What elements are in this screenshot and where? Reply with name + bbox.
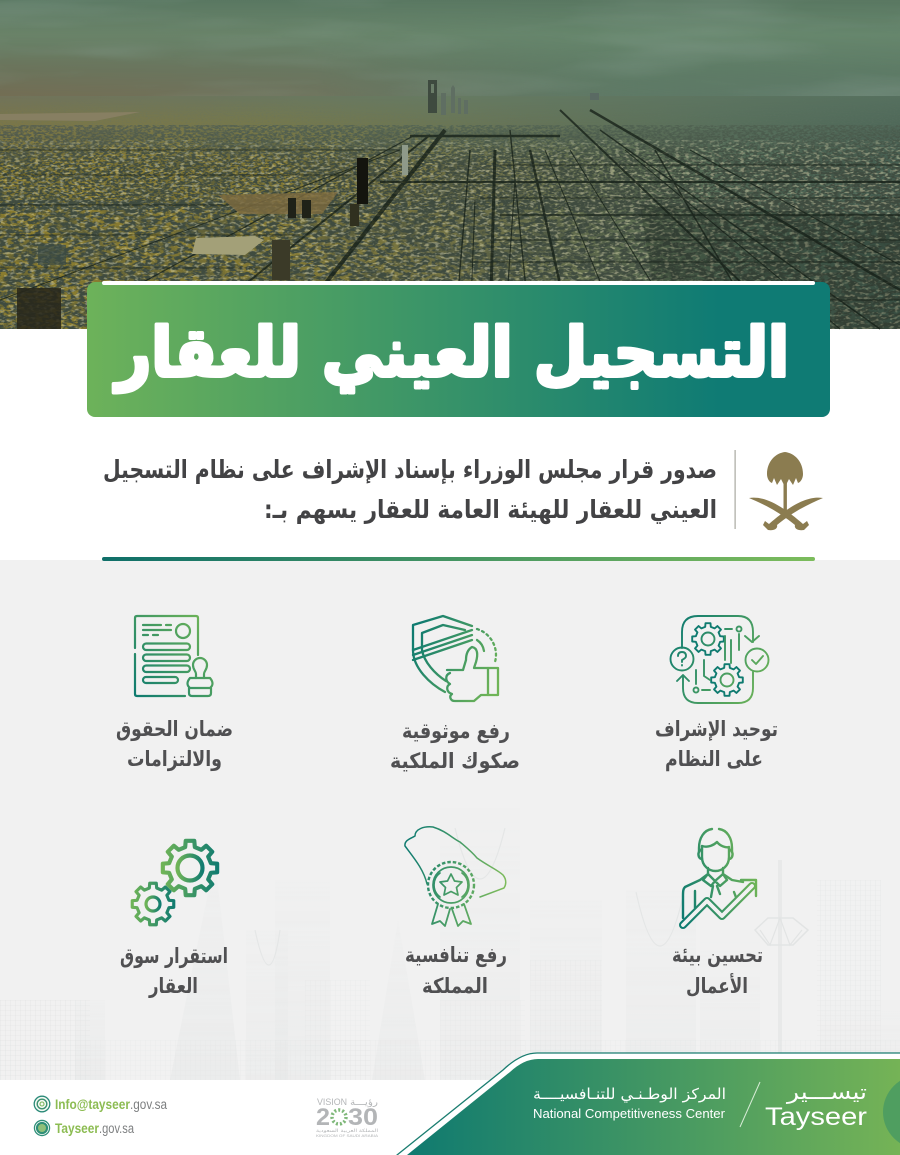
label: على النظام [665,747,763,771]
icon: document with stamp [135,616,212,696]
label: العقار [148,974,198,998]
label: رفع موثوقية [402,719,510,743]
benefit: improving the business environment [672,829,763,998]
grey content area [0,560,900,1080]
title banner [87,281,830,417]
Tayseer logo Arabic: تيســـير [786,1080,867,1104]
contact: website: Tayseer [55,1121,100,1136]
contact: email: Info@tayseer [55,1097,131,1112]
logo: Vision 2030: 2 [316,1104,330,1131]
intro text: العيني للعقار للهيئة العامة للعقار يسهم بـ: [264,495,717,525]
label [120,944,228,998]
label: والالتزامات [127,747,222,771]
icon: Saudi map with rosette [405,827,506,926]
label: الأعمال [686,972,748,998]
logo: Vision 2030 [316,1097,378,1138]
benefit: raising reliability of ownership deeds [390,616,520,773]
label: المملكة [422,974,488,998]
benefit: stability of the real-estate market [120,841,228,998]
label [672,943,763,998]
contact: website [34,1120,134,1136]
center name English: National Competitiveness Center [533,1106,726,1121]
label [116,717,233,771]
label: رفع تنافسية [405,943,507,967]
intro text: صدور قرار مجلس الوزراء بإسناد الإشراف على نظام التسجيل [103,455,717,485]
icon: two gears [132,841,217,925]
header photo: Riyadh skyline [0,0,900,329]
contact: email [34,1096,167,1112]
benefit: unifying supervision of the system [655,616,778,771]
center name Arabic: المركز الوطـنـي للتنـافسيــــة [533,1085,726,1104]
label: ضمان الحقوق [116,717,233,741]
icon: globe [34,1120,50,1136]
label [390,719,520,773]
icon: businessman with rising arrow [683,829,756,925]
benefit: raising the Kingdom's competitiveness [405,827,507,998]
footer green panel [397,1053,900,1155]
footer white strip [0,1080,900,1155]
icon: shield with thumbs up [413,616,498,701]
label: تحسين بيئة [672,943,763,967]
icon: Saudi emblem palm and swords [749,452,823,530]
logo: Vision 2030: VISION [317,1097,347,1107]
label: صكوك الملكية [390,749,520,773]
vertical divider [734,450,736,529]
intro text [103,455,717,525]
Tayseer logo Latin: Tayseer [765,1103,867,1131]
title: التسجيل العيني للعقار [113,314,789,393]
label: استقرار سوق [120,944,228,968]
logo: Vision 2030: 30 [348,1104,378,1131]
contact: email: .gov.sa [130,1097,167,1112]
tower: Kingdom Centre [428,80,437,113]
icon: at sign [34,1096,50,1112]
gradient rule [102,557,815,561]
logo: Vision 2030: رؤيـــة [350,1098,378,1108]
benefit: ensuring rights and obligations [116,616,233,771]
slash divider [740,1082,760,1127]
label [655,717,778,771]
icon: gears process loop [670,616,768,703]
label: توحيد الإشراف [655,717,778,741]
logo: Vision 2030: KINGDOM OF SAUDI ARABIA [316,1133,378,1138]
contact: website: .gov.sa [99,1121,134,1136]
logo: Vision 2030: المملكة العربية السعودية [316,1128,378,1134]
faint skyline watermark [0,808,900,1080]
label [405,943,507,998]
